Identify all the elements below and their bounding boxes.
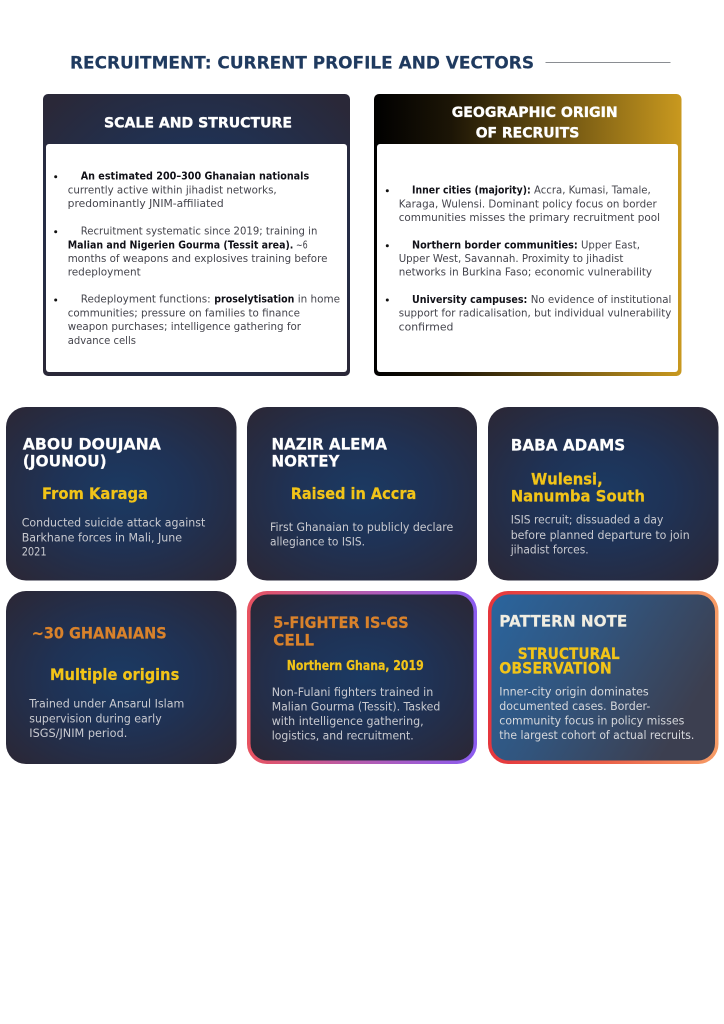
bullet list: scale: weapon purchases; intelligence gathering for (68, 321, 302, 333)
card: Abou Doujana: ABOU DOUJANA (23, 434, 162, 453)
card: 5-fighter IS-GS cell: CELL (273, 630, 314, 649)
bullet list: origin: networks in Burkina Faso; economic vulnerability (399, 267, 652, 279)
card: Nazir Alema Nortey: First Ghanaian to publicly declare (270, 521, 453, 534)
card: Nazir Alema Nortey: NAZIR ALEMA (272, 434, 388, 453)
bullet list: origin: Northern border communities: (412, 239, 578, 251)
bullet list: scale: An estimated 200–300 Ghanaian nationals (81, 171, 309, 183)
bullet list: scale: currently active within jihadist networks, (68, 184, 277, 196)
card: ~30 Ghanaians: ~30 GHANAIANS (32, 623, 167, 642)
bullet list: origin: Accra, Kumasi, Tamale, (534, 185, 651, 197)
bullet list: origin: support for radicalisation, but individual vulnerability (399, 308, 671, 320)
card: Abou Doujana (6, 407, 236, 580)
bullet list: scale: ~6 (296, 239, 308, 251)
bullet list: scale: proselytisation (214, 294, 294, 306)
card: ~30 Ghanaians: Multiple origins (50, 665, 179, 684)
card: pattern note: the largest cohort of actual recruits. (499, 729, 694, 742)
bullet list: scale: redeployment (68, 267, 141, 279)
card: Nazir Alema Nortey: Raised in Accra (291, 484, 416, 503)
card: Nazir Alema Nortey: NORTEY (272, 452, 340, 471)
card: pattern note: community focus in policy misses (499, 715, 684, 728)
card: pattern note: Inner-city origin dominates (499, 686, 649, 699)
card: ~30 Ghanaians: Trained under Ansarul Islam (28, 698, 184, 711)
card: ~30 Ghanaians: supervision during early (29, 712, 162, 725)
card: Abou Doujana: From Karaga (42, 484, 148, 503)
bullet list: scale: months of weapons and explosives training before (68, 253, 327, 265)
bullet list: origin: Inner cities (majority): (412, 185, 531, 197)
bullet list: origin: Upper West, Savannah. Proximity to jihadist (399, 253, 623, 265)
card: Baba Adams: Nanumba South (511, 487, 645, 506)
card: 5-fighter IS-GS cell: Non-Fulani fighters trained in (272, 686, 433, 699)
card: 5-fighter IS-GS cell: Malian Gourma (Tessit). Tasked (272, 701, 440, 714)
card: Abou Doujana: Conducted suicide attack against (22, 517, 206, 530)
card: Baba Adams (488, 407, 718, 580)
bullet list: scale: Redeployment functions: (81, 294, 211, 306)
bullet list: scale: predominantly JNIM-affiliated (68, 198, 224, 210)
bullet list: origin: No evidence of institutional (531, 294, 671, 306)
panel: scale and structure (43, 94, 350, 376)
bullet list: origin: communities misses the primary recruitment pool (399, 212, 660, 224)
panel: geographic origin of recruits (374, 94, 682, 376)
bullet list: origin: Karaga, Wulensi. Dominant policy focus on border (399, 198, 657, 210)
heading: geographic origin: GEOGRAPHIC ORIGIN (452, 105, 618, 121)
bullet list: scale (54, 171, 340, 347)
card: 5-fighter IS-GS cell: Northern Ghana, 2019 (287, 659, 424, 674)
heading: scale and structure: SCALE AND STRUCTURE (104, 116, 292, 132)
bullet list: scale: in home (298, 294, 340, 306)
card: Abou Doujana: (JOUNOU) (23, 452, 107, 471)
card: pattern note: PATTERN NOTE (499, 612, 627, 631)
bullet list: scale: Malian and Nigerien Gourma (Tessit area). (68, 239, 293, 251)
bullet list: scale: advance cells (68, 335, 136, 347)
card: 5-fighter IS-GS cell: logistics, and recruitment. (272, 730, 414, 743)
heading: geographic origin: OF RECRUITS (476, 125, 579, 141)
card: Baba Adams: Wulensi, (531, 469, 603, 488)
card: 5-fighter IS-GS cell (247, 591, 477, 764)
heading: geographic origin (452, 105, 618, 141)
card: Abou Doujana: 2021 (22, 546, 47, 559)
bullet list: origin (386, 185, 671, 333)
bullet list: origin: Upper East, (581, 239, 640, 251)
bullet list: origin: University campuses: (412, 294, 527, 306)
bullet list: scale: communities; pressure on families to finance (68, 308, 300, 320)
card: ~30 Ghanaians: ISGS/JNIM period. (29, 727, 127, 740)
card: Baba Adams: BABA ADAMS (511, 436, 625, 455)
card: Baba Adams: before planned departure to join (511, 529, 690, 542)
card: Nazir Alema Nortey (247, 407, 477, 580)
card: Baba Adams: jihadist forces. (510, 543, 589, 556)
card: Baba Adams: ISIS recruit; dissuaded a day (511, 514, 664, 527)
bullet list: origin: confirmed (399, 321, 453, 333)
card: pattern note (488, 591, 718, 764)
card: pattern note: documented cases. Border- (499, 700, 650, 713)
card: Abou Doujana: Barkhane forces in Mali, June (22, 531, 182, 544)
card: pattern note: OBSERVATION (499, 659, 612, 678)
card: pattern note: STRUCTURAL (518, 644, 620, 663)
card: 5-fighter IS-GS cell: with intelligence gathering, (272, 715, 424, 728)
card: ~30 Ghanaians (6, 591, 236, 764)
card: Nazir Alema Nortey: allegiance to ISIS. (270, 536, 365, 549)
title: RECRUITMENT: CURRENT PROFILE AND VECTORS (70, 54, 534, 74)
bullet list: scale: Recruitment systematic since 2019; training in (81, 226, 317, 238)
card: 5-fighter IS-GS cell: 5-FIGHTER IS-GS (273, 613, 409, 632)
